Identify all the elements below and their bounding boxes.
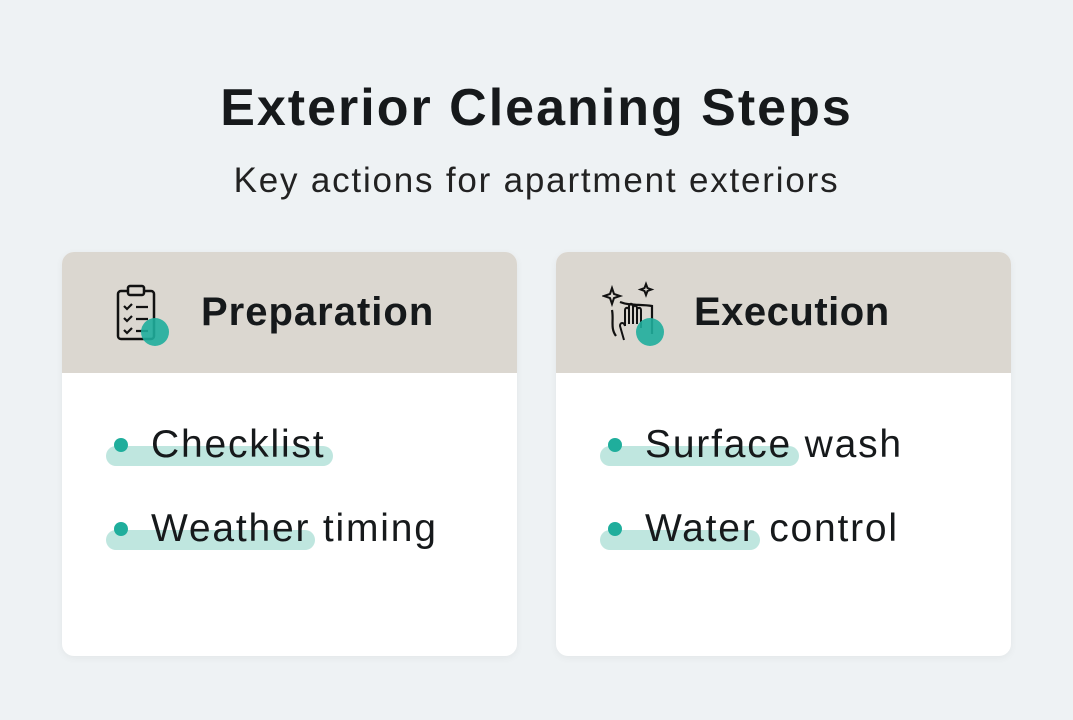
panel: execution [556, 252, 1011, 656]
header: execution: Execution [694, 290, 890, 334]
icon: clipboard [116, 284, 169, 346]
header: preparation: Preparation [201, 290, 434, 334]
item: surface wash: Surface wash [645, 423, 903, 466]
item: water control: Water control [645, 507, 899, 550]
title: Exterior Cleaning Steps [220, 79, 853, 137]
header: preparation [62, 252, 517, 373]
header: execution [556, 252, 1011, 373]
item: checklist: Checklist [151, 423, 325, 466]
item: weather timing: Weather timing [151, 507, 438, 550]
icon: hand cleaning [602, 281, 664, 346]
subtitle: Key actions for apartment exteriors [234, 161, 839, 200]
panel: preparation [62, 252, 517, 656]
